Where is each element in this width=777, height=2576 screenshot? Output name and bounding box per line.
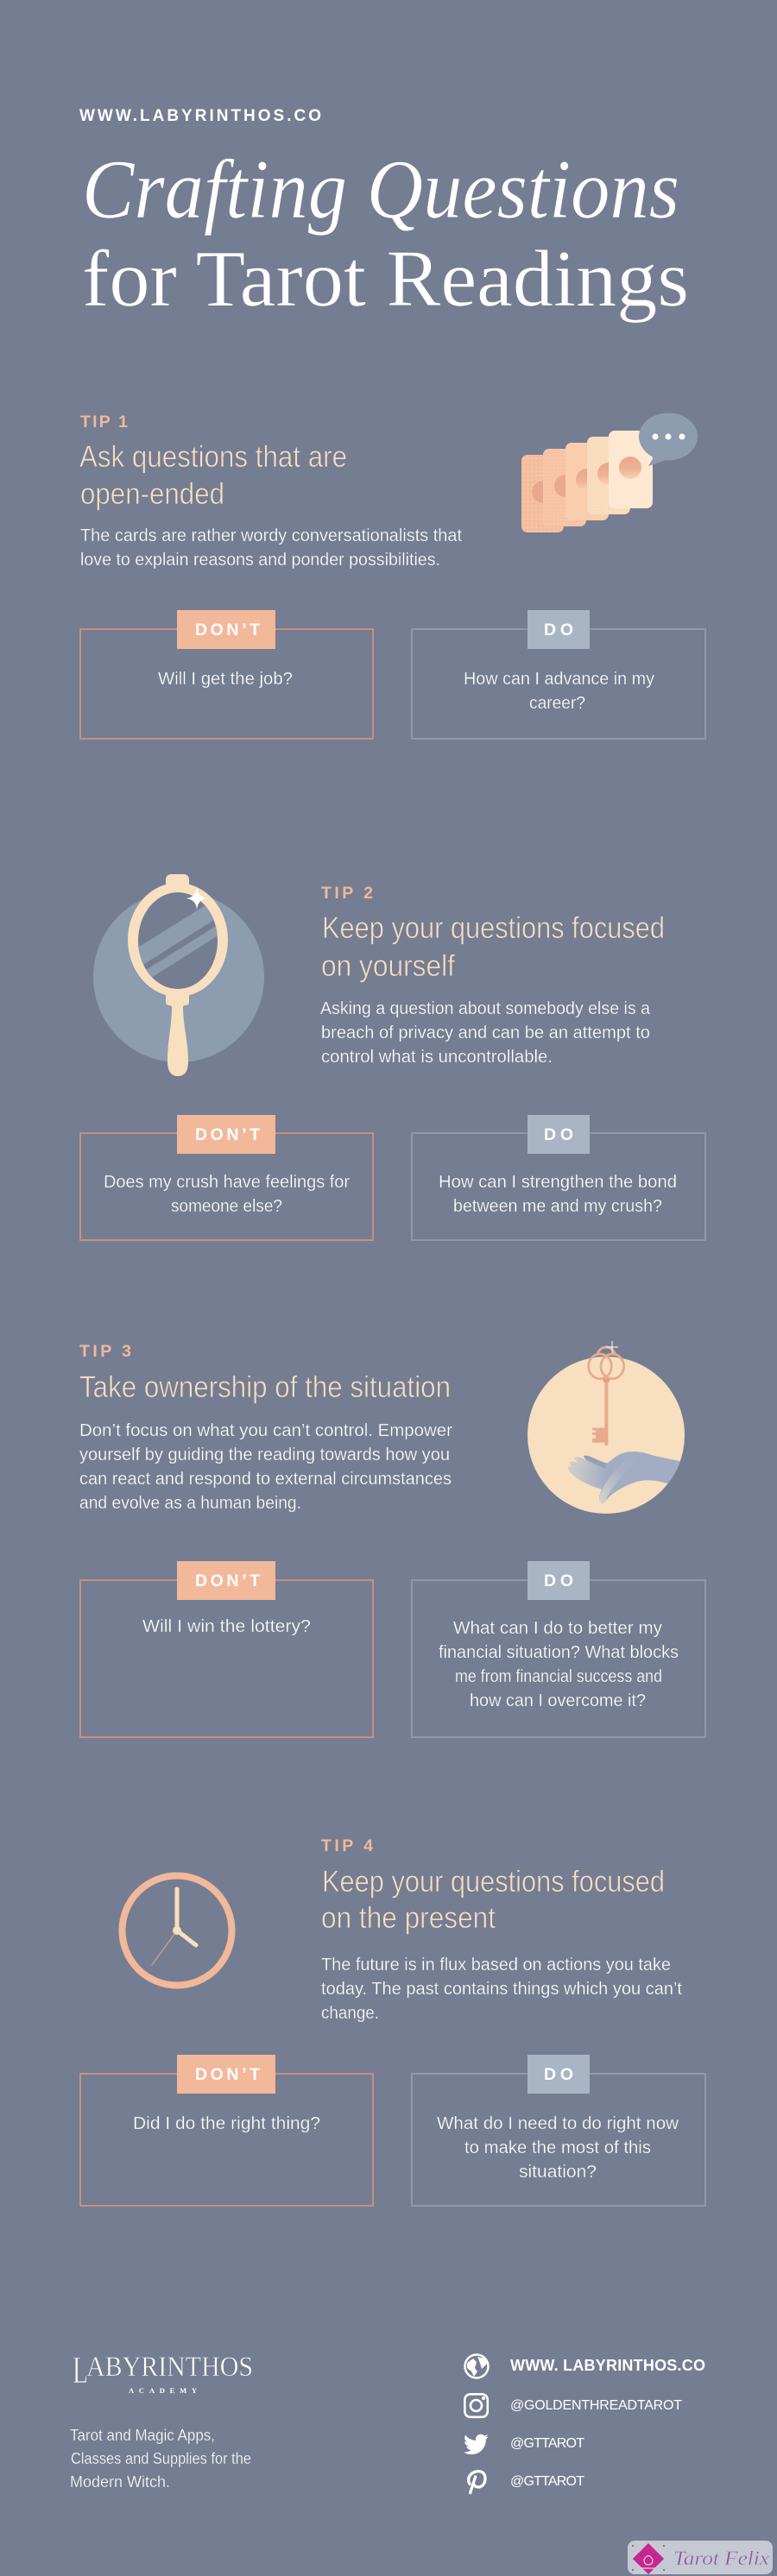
tip 2 body text: breach of privacy and can be an attempt to <box>321 1023 650 1042</box>
do box <box>412 1115 705 1240</box>
tip 3 body text: can react and respond to external circumstances <box>79 1469 452 1489</box>
tip 2 label: TIP 2 <box>321 884 373 903</box>
tip 2 body text: control what is uncontrollable. <box>321 1047 553 1067</box>
icon: fanned tarot cards with speech bubble <box>521 413 698 532</box>
tip 1 heading: Ask questions that are <box>79 440 347 474</box>
do box: DO <box>544 2065 573 2084</box>
tip 3 heading: Take ownership of the situation <box>79 1370 451 1404</box>
panel: tip 1 <box>79 413 705 739</box>
tip 1 body text <box>80 526 462 570</box>
logo: labyrinthos academy <box>73 2349 253 2395</box>
tip 4 body text: change. <box>321 2003 379 2023</box>
tip 4 label: TIP 4 <box>321 1836 373 1855</box>
panel: tip 2 <box>80 874 705 1240</box>
tip 2 body text <box>320 998 651 1067</box>
panel: footer <box>70 2349 773 2574</box>
icon: globe <box>464 2354 489 2378</box>
tip 1 label: TIP 1 <box>80 413 128 431</box>
instagram handle: @GOLDENTHREADTAROT <box>510 2398 682 2413</box>
do box: career? <box>529 693 585 713</box>
tip 1 heading <box>79 440 347 511</box>
tip 4 heading: on the present <box>321 1901 496 1935</box>
tip 3 body text: Don’t focus on what you can’t control. Empower <box>79 1420 452 1440</box>
don't box <box>80 2055 373 2206</box>
pinterest handle: @GTTAROT <box>510 2474 584 2489</box>
don't box: DON’T <box>195 1571 260 1590</box>
panel: tip 4 <box>80 1836 705 2206</box>
tip 1 body text: love to explain reasons and ponder possibilities. <box>80 550 440 570</box>
don't box <box>80 1561 373 1737</box>
footer tagline: Tarot and Magic Apps, <box>70 2426 215 2444</box>
website url header: WWW.LABYRINTHOS.CO <box>79 107 321 125</box>
don't box <box>80 610 373 739</box>
tip 3 body text <box>79 1420 452 1513</box>
icon: twitter <box>464 2434 489 2454</box>
do box: me from financial success and <box>455 1666 662 1686</box>
tip 3 label: TIP 3 <box>79 1342 131 1361</box>
logo: labyrinthos academy: ACADEMY <box>129 2386 197 2395</box>
do box: situation? <box>519 2162 597 2182</box>
logo: labyrinthos academy: ABYRINTHOS <box>86 2352 253 2383</box>
tip 2 heading: Keep your questions focused <box>322 911 665 945</box>
don't box: someone else? <box>171 1196 282 1216</box>
badge: tarot felix <box>628 2541 773 2574</box>
icon: instagram <box>464 2394 488 2417</box>
tip 4 body text: today. The past contains things which you can’t <box>321 1979 682 1999</box>
twitter handle: @GTTAROT <box>510 2436 584 2451</box>
tip 2 heading: on yourself <box>321 949 455 983</box>
title: for Tarot Readings <box>82 235 689 324</box>
do box: How can I advance in my <box>464 669 655 689</box>
don't box: Did I do the right thing? <box>133 2113 320 2133</box>
website link: WWW. LABYRINTHOS.CO <box>510 2357 705 2374</box>
logo: labyrinthos academy: L <box>73 2349 88 2391</box>
title <box>82 143 689 324</box>
do box: What do I need to do right now <box>437 2113 679 2133</box>
tip 4 heading: Keep your questions focused <box>322 1865 665 1899</box>
do box: how can I overcome it? <box>470 1691 646 1710</box>
do box: between me and my crush? <box>453 1196 662 1216</box>
icon: key over open hand <box>527 1341 693 1514</box>
footer tagline: Modern Witch. <box>70 2472 170 2491</box>
panel: tip 3 <box>79 1341 705 1737</box>
don't box: Will I win the lottery? <box>142 1616 311 1636</box>
tip 1 heading: open-ended <box>80 477 224 511</box>
do box: financial situation? What blocks <box>439 1642 679 1662</box>
don't box: DON’T <box>195 620 260 639</box>
tip 4 body text <box>321 1955 682 2023</box>
icon: pinterest <box>469 2472 485 2493</box>
tip 2 heading <box>321 911 665 983</box>
tip 4 heading <box>321 1865 665 1935</box>
don't box: DON’T <box>195 2065 260 2084</box>
don't box: DON’T <box>195 1125 260 1144</box>
footer tagline: Classes and Supplies for the <box>71 2449 251 2467</box>
do box: to make the most of this <box>464 2138 651 2157</box>
icon: hand mirror <box>93 874 264 1076</box>
don't box: Does my crush have feelings for <box>104 1172 350 1192</box>
do box: What can I do to better my <box>453 1618 663 1638</box>
tip 4 body text: The future is in flux based on actions you take <box>321 1955 671 1975</box>
tip 3 body text: yourself by guiding the reading towards how you <box>79 1445 450 1464</box>
don't box: Will I get the job? <box>158 669 293 689</box>
do box <box>412 610 705 739</box>
do box: How can I strengthen the bond <box>439 1172 677 1192</box>
badge: tarot felix: Tarot Felix <box>673 2548 770 2569</box>
tip 2 body text: Asking a question about somebody else is a <box>320 998 651 1018</box>
do box: DO <box>544 1571 573 1590</box>
do box: DO <box>544 1125 573 1144</box>
do box: DO <box>544 620 573 639</box>
icon: clock <box>123 1876 231 1985</box>
tip 3 body text: and evolve as a human being. <box>79 1493 301 1513</box>
title: Crafting Questions <box>82 143 679 236</box>
don't box <box>80 1115 373 1240</box>
do box <box>412 1561 705 1737</box>
footer tagline <box>70 2426 251 2491</box>
do box <box>412 2055 705 2206</box>
tip 1 body text: The cards are rather wordy conversationalists that <box>80 526 462 545</box>
